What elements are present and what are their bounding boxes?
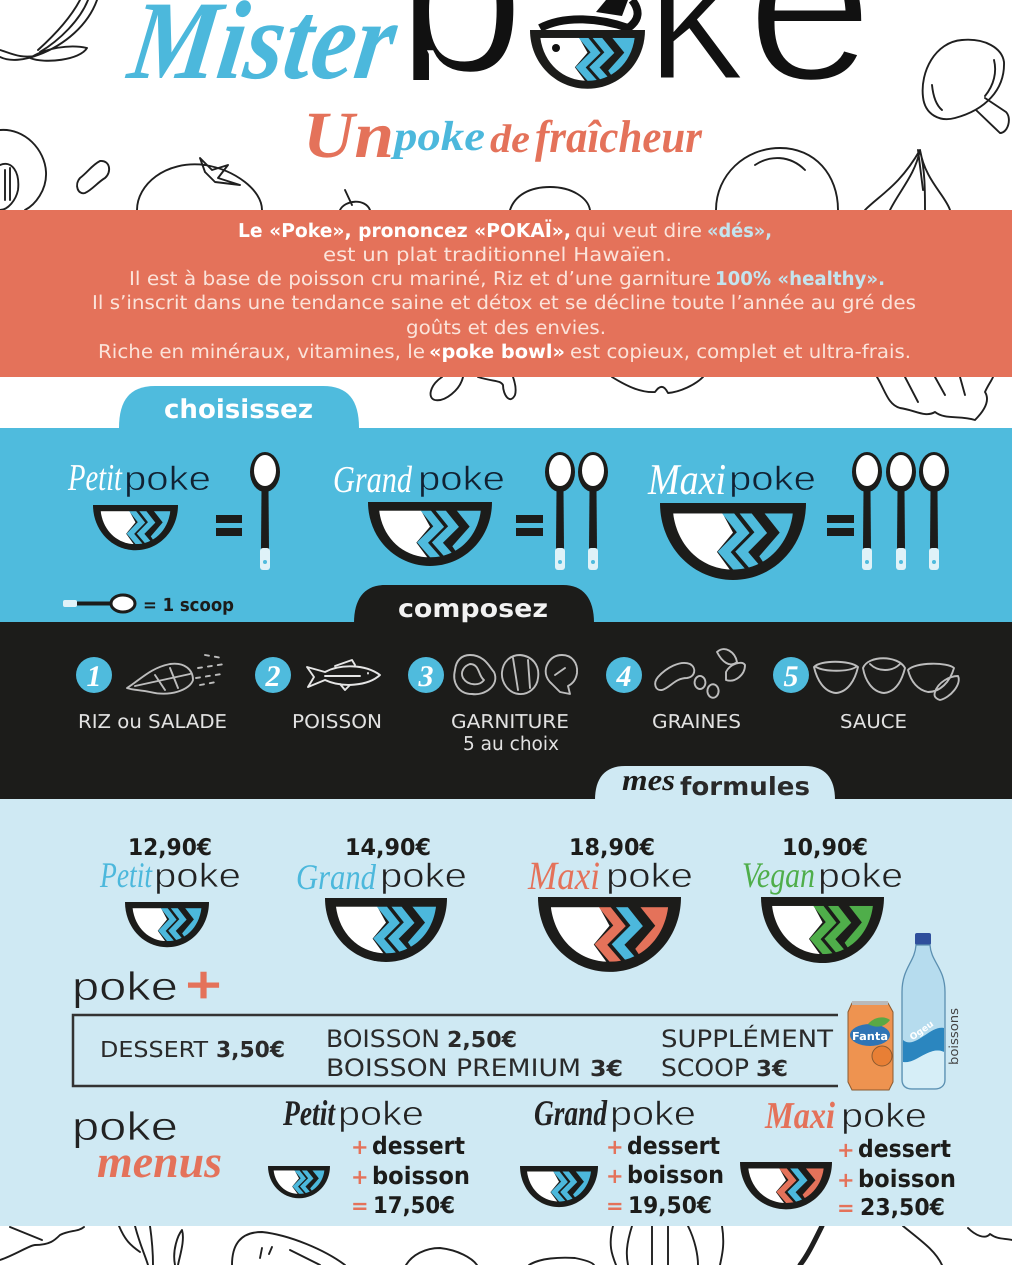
extra: dessert: DESSERT xyxy=(100,1038,209,1063)
menu: petit: dessert xyxy=(372,1132,465,1160)
formula: maxi poke 18,90 xyxy=(527,835,693,972)
step 2: poisson: POISSON xyxy=(292,711,382,733)
intro text: Il est à base de poisson cru mariné, Riz et d’une garniture xyxy=(129,268,711,290)
intro text: Il s’inscrit dans une tendance saine et détox et se décline toute l’année au gré des xyxy=(92,292,916,314)
formula: vegan poke 10,90: Vegan xyxy=(742,855,815,895)
formula: vegan poke 10,90: 10,90€ xyxy=(782,835,868,861)
heading: poke menus: menus xyxy=(97,1136,222,1187)
size: maxi poke: poke xyxy=(729,460,816,498)
step 2: poisson: 2 xyxy=(264,660,280,693)
step 4: graines xyxy=(606,649,745,733)
menu: petit: boisson xyxy=(372,1162,470,1190)
menu: petit: poke xyxy=(338,1095,424,1133)
heading: composez: composez xyxy=(398,594,548,623)
size: grand poke: poke xyxy=(418,460,505,498)
icon: orange can xyxy=(848,1001,893,1090)
menu: maxi: 23,50€ xyxy=(860,1195,945,1221)
tagline: poke xyxy=(391,114,485,160)
menu: petit: 17,50€ xyxy=(373,1193,455,1219)
step 2: poisson xyxy=(255,657,382,733)
extra: boissons: BOISSON PREMIUM xyxy=(326,1054,581,1082)
menu: grand: Grand xyxy=(534,1093,608,1133)
step 4: graines: GRAINES xyxy=(652,711,741,733)
menu: grand: + xyxy=(606,1164,624,1188)
menu: grand: 19,50€ xyxy=(628,1193,712,1219)
size: maxi poke xyxy=(647,452,949,580)
formula: grand poke 14,90: 14,90€ xyxy=(345,835,431,861)
formula: petit poke 12,90: Petit xyxy=(99,855,153,895)
step 3: garniture: 3 xyxy=(418,660,434,693)
formula: petit poke 12,90 xyxy=(99,835,241,947)
tagline: de xyxy=(490,116,530,161)
formula: petit poke 12,90: 12,90€ xyxy=(128,835,212,861)
tagline: fraîcheur xyxy=(535,111,703,162)
intro text xyxy=(92,219,916,363)
formula: maxi poke 18,90: poke xyxy=(606,857,693,895)
size: grand poke xyxy=(333,452,608,570)
heading: mes formules: mes xyxy=(622,764,675,797)
menu: petit: = xyxy=(351,1194,369,1218)
icon: fish bowl xyxy=(530,0,645,89)
tagline xyxy=(303,99,703,172)
icon: water bottle xyxy=(902,933,945,1089)
extra: supplement xyxy=(661,1024,833,1082)
extra: supplement: SCOOP xyxy=(661,1054,749,1082)
menu: maxi: + xyxy=(837,1138,855,1162)
formula: maxi poke 18,90: Maxi xyxy=(527,853,600,898)
doodles: bottom vegetables xyxy=(0,1226,1012,1265)
menu: grand: poke xyxy=(610,1095,696,1133)
extra: supplement: 3€ xyxy=(756,1057,788,1082)
step 5: sauce: 5 xyxy=(784,660,798,693)
menu: grand: + xyxy=(606,1135,624,1159)
size: maxi poke: Maxi xyxy=(647,455,726,504)
size: grand poke: Grand xyxy=(333,459,413,501)
legend: 1 scoop: = 1 scoop xyxy=(143,595,234,616)
extra: boissons: 3€ xyxy=(590,1057,623,1082)
heading: poke menus: poke xyxy=(72,1105,178,1149)
panel: choisissez xyxy=(0,386,1012,623)
heading: poke plus xyxy=(72,955,221,1015)
menu: petit xyxy=(268,1093,470,1219)
intro text: «dés», xyxy=(707,220,772,242)
intro text: 100% «healthy». xyxy=(715,268,885,290)
legend: 1 scoop xyxy=(63,595,234,616)
size: petit poke xyxy=(67,452,280,570)
formula: vegan poke 10,90 xyxy=(742,835,903,963)
menu: petit: + xyxy=(351,1165,369,1189)
step 3: garniture: 5 au choix xyxy=(463,733,559,755)
menu: maxi xyxy=(740,1095,956,1221)
menu: maxi: poke xyxy=(841,1097,927,1135)
heading: poke menus xyxy=(72,1105,222,1187)
extras box xyxy=(73,1015,838,1086)
step 1: riz ou salade xyxy=(76,655,227,733)
intro text: Le «Poke», prononcez «POKAÏ», xyxy=(238,219,571,242)
menu: maxi: Maxi xyxy=(764,1095,835,1137)
size: petit poke: Petit xyxy=(67,457,123,499)
formula: grand poke 14,90: poke xyxy=(380,857,467,895)
extra: dessert xyxy=(100,1038,285,1063)
step 5: sauce: SAUCE xyxy=(840,711,907,733)
panel: composez xyxy=(0,585,1012,800)
formula: maxi poke 18,90: 18,90€ xyxy=(569,835,655,861)
heading: mes formules xyxy=(622,764,810,801)
intro text: est un plat traditionnel Hawaïen. xyxy=(323,244,672,266)
formula: grand poke 14,90: Grand xyxy=(296,857,377,897)
intro text: qui veut dire xyxy=(575,220,702,242)
menu: maxi: = xyxy=(837,1196,855,1220)
icon: water bottle: Ogeu xyxy=(908,1020,936,1043)
menu: maxi: + xyxy=(837,1168,855,1192)
extra: boissons: 2,50€ xyxy=(447,1028,517,1053)
intro text: goûts et des envies. xyxy=(406,317,606,339)
heading: poke plus: poke xyxy=(72,965,178,1009)
step 1: riz ou salade: 1 xyxy=(86,660,102,693)
intro text: Riche en minéraux, vitamines, le xyxy=(98,341,425,363)
menu: grand: boisson xyxy=(627,1161,724,1189)
panel: mes formules xyxy=(0,764,1012,1226)
menu: grand: dessert xyxy=(627,1132,720,1160)
menu: grand xyxy=(520,1093,724,1219)
panel: introduction xyxy=(0,210,1012,377)
formula: vegan poke 10,90: poke xyxy=(818,857,903,895)
menu: maxi: boisson xyxy=(858,1165,956,1193)
intro text: est copieux, complet et ultra-frais. xyxy=(570,341,911,363)
formula: petit poke 12,90: poke xyxy=(154,857,241,895)
heading: choisissez: choisissez xyxy=(164,395,313,425)
menu: maxi: dessert xyxy=(858,1135,951,1163)
menu: petit: + xyxy=(351,1135,369,1159)
menu: grand: = xyxy=(606,1194,624,1218)
doodles: under the intro band xyxy=(431,377,993,420)
step 3: garniture: GARNITURE xyxy=(451,711,569,733)
label: boissons: boissons xyxy=(946,1008,961,1065)
step 5: sauce xyxy=(773,657,959,733)
step 3: garniture xyxy=(408,655,577,755)
step 1: riz ou salade: RIZ ou SALADE xyxy=(78,711,227,733)
extra: boissons xyxy=(326,1025,623,1082)
heading: poke plus: + xyxy=(185,955,221,1015)
step 4: graines: 4 xyxy=(616,660,632,693)
icon: orange can: Fanta xyxy=(852,1030,888,1043)
extra: boissons: BOISSON xyxy=(326,1025,440,1053)
heading: mes formules: formules xyxy=(680,772,810,801)
menu: petit: Petit xyxy=(282,1093,336,1133)
extra: supplement: SUPPLÉMENT xyxy=(661,1024,833,1053)
formula: grand poke 14,90 xyxy=(296,835,467,962)
size: petit poke: poke xyxy=(124,460,211,498)
tagline: Un xyxy=(303,99,394,172)
intro text: «poke bowl» xyxy=(429,341,565,363)
logo: poke xyxy=(413,0,862,89)
doodles: top vegetables xyxy=(0,0,1009,210)
extra: dessert: 3,50€ xyxy=(216,1038,285,1063)
